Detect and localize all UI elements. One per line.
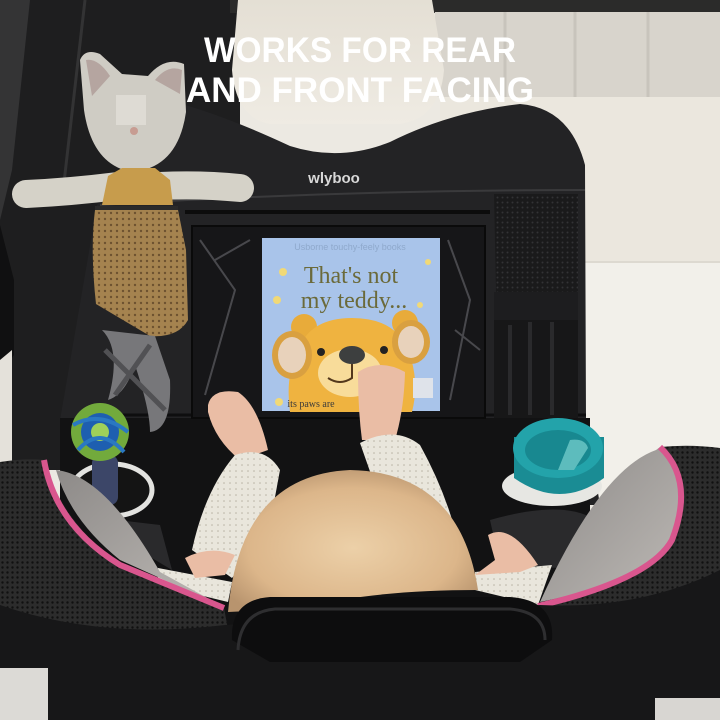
book: That's not my teddy: That's not <box>304 263 398 289</box>
mesh pocket <box>494 194 578 292</box>
cup holder right with teal cup <box>502 418 604 506</box>
toy cat hanging from pocket <box>26 52 240 432</box>
baby head <box>228 470 478 612</box>
title: AND FRONT FACING <box>186 71 534 110</box>
brand logo: wlyboo <box>307 170 360 187</box>
baby hands and torso <box>158 532 552 605</box>
book: That's not my teddy: its paws are <box>287 399 335 410</box>
baby feet and legs <box>192 365 458 578</box>
headrest <box>232 0 444 124</box>
bear <box>272 310 430 412</box>
side pocket <box>494 292 578 320</box>
clear window pocket <box>192 226 485 418</box>
infant car seat <box>0 446 720 720</box>
car seat harness <box>118 509 592 570</box>
organizer: black seat-back panel <box>60 104 600 628</box>
title <box>186 31 534 110</box>
top zip pocket <box>185 210 490 214</box>
book: That's not my teddy: my teddy... <box>301 288 407 314</box>
cup holder left with ring toy <box>71 403 152 516</box>
book: That's not my teddy <box>262 238 440 412</box>
book: That's not my teddy: Usborne touchy-feely books <box>294 242 406 252</box>
title: WORKS FOR REAR <box>204 31 516 70</box>
